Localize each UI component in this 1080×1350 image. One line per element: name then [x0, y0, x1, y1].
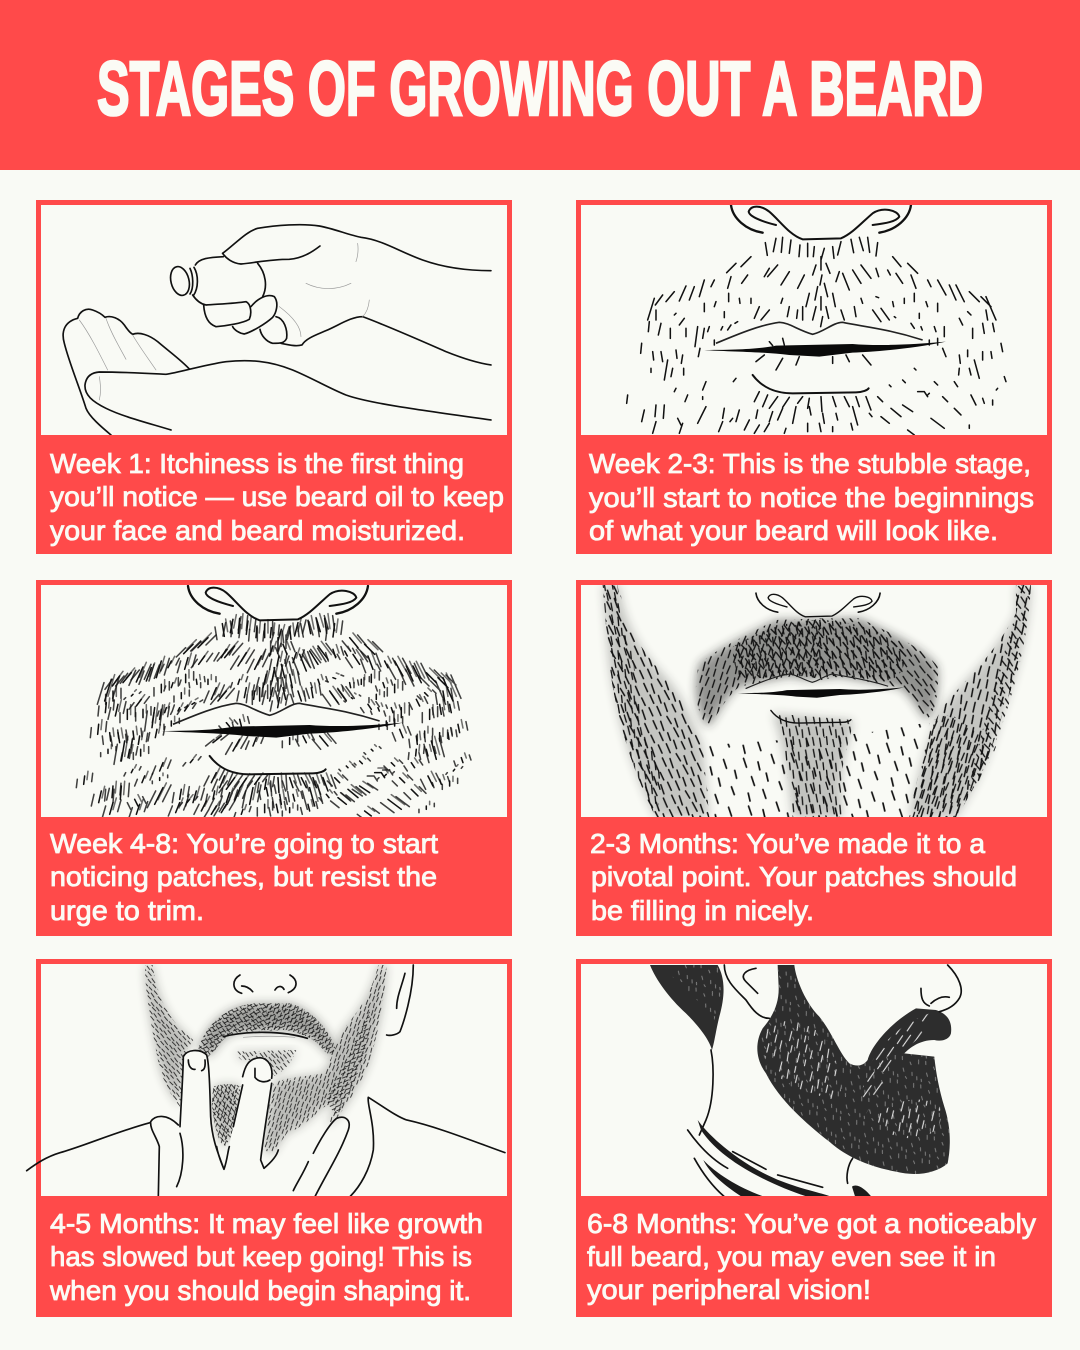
illustration: full beard profile [650, 965, 961, 1197]
illustration: shaping the beard [145, 965, 505, 1200]
caption: week 4-8: noticing patches, but resist the [50, 861, 437, 892]
caption: 2-3 months: 2-3 Months: You’ve made it to a [590, 828, 985, 859]
caption: 2-3 months: pivotal point. Your patches should [591, 861, 1017, 892]
panel: 6-8 months [576, 959, 1052, 1317]
caption: 6-8 months: your peripheral vision! [587, 1274, 871, 1305]
panel: week 2-3 [576, 200, 1052, 554]
caption: week 2-3 [589, 448, 1034, 546]
caption: 2-3 months: be filling in nicely. [591, 895, 814, 926]
shoulder line crossing the frame [27, 1123, 150, 1171]
caption: 6-8 months: 6-8 Months: You’ve got a noticeably [587, 1208, 1036, 1239]
panel: 4-5 months [27, 959, 512, 1317]
caption: week 2-3: of what your beard will look like. [589, 515, 998, 546]
illustration: filling-in beard [603, 585, 1031, 817]
caption: week 1: you’ll notice — use beard oil to keep [50, 481, 504, 512]
caption: week 4-8: urge to trim. [50, 895, 204, 926]
caption: week 4-8 [50, 828, 438, 926]
panel: week 4-8 [36, 580, 512, 936]
caption: week 2-3: you’ll start to notice the beginnings [589, 482, 1034, 513]
title banner [0, 0, 1080, 170]
illustration: patchy beard [76, 586, 471, 819]
caption: 4-5 months: 4-5 Months: It may feel like growth [50, 1208, 483, 1239]
caption: week 4-8: Week 4-8: You’re going to start [50, 828, 438, 859]
caption: week 1: Week 1: Itchiness is the first thing [50, 448, 464, 479]
illustration: hands with beard oil bottle [63, 225, 491, 435]
caption: week 1 [50, 448, 504, 546]
panel: 2-3 months [576, 580, 1052, 936]
illustration: stubble [627, 205, 1006, 435]
caption: 4-5 months: when you should begin shaping it. [49, 1275, 471, 1306]
caption: 2-3 months [590, 828, 1017, 926]
caption: 6-8 months: full beard, you may even see it in [587, 1241, 996, 1272]
caption: 4-5 months [49, 1208, 483, 1306]
caption: week 1: your face and beard moisturized. [50, 515, 465, 546]
caption: 6-8 months [587, 1208, 1036, 1305]
caption: 4-5 months: has slowed but keep going! This is [50, 1241, 472, 1272]
panel: week 1 [36, 200, 512, 554]
caption: week 2-3: Week 2-3: This is the stubble stage, [589, 448, 1031, 479]
